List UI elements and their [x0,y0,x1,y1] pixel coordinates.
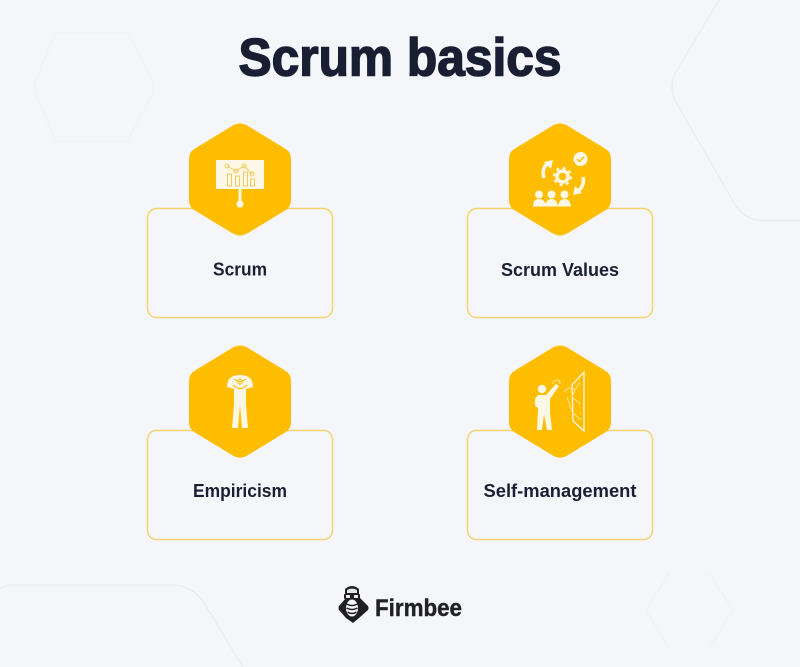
label: Empiricism: Empiricism [193,481,287,501]
logo: Firmbee [338,586,462,623]
label: Scrum Values: Scrum Values [501,260,619,280]
label: Scrum: Scrum [213,260,267,280]
icon: presentation chart [216,160,264,208]
icon: team, gear and check [533,152,588,206]
label: Self-management: Self-management [484,481,636,501]
card: Self-management [468,346,652,540]
background hexagon: top left [34,33,154,141]
icon: bee mascot [338,586,368,623]
card: Scrum Values [468,124,652,318]
icon: person drawing on board [535,372,584,431]
card outline: Self-management [468,430,652,540]
wordmark: Firmbee [375,595,462,622]
card: Empiricism [148,346,332,540]
card outline: Scrum Values [468,208,652,318]
background hexagon: top right [672,0,800,220]
title: Scrum basics [238,28,562,88]
background hexagon: bottom right [646,572,733,650]
hexagon badge: Scrum [189,124,291,236]
hexagon badge: Scrum Values [509,124,611,236]
hexagon badge: Self-management [509,346,611,458]
icon: person holding head [227,375,253,428]
card outline: Empiricism [148,430,332,540]
card: Scrum [148,124,332,318]
background hexagon: bottom left [0,585,243,667]
card outline: Scrum [148,208,332,318]
hexagon badge: Empiricism [189,346,291,458]
